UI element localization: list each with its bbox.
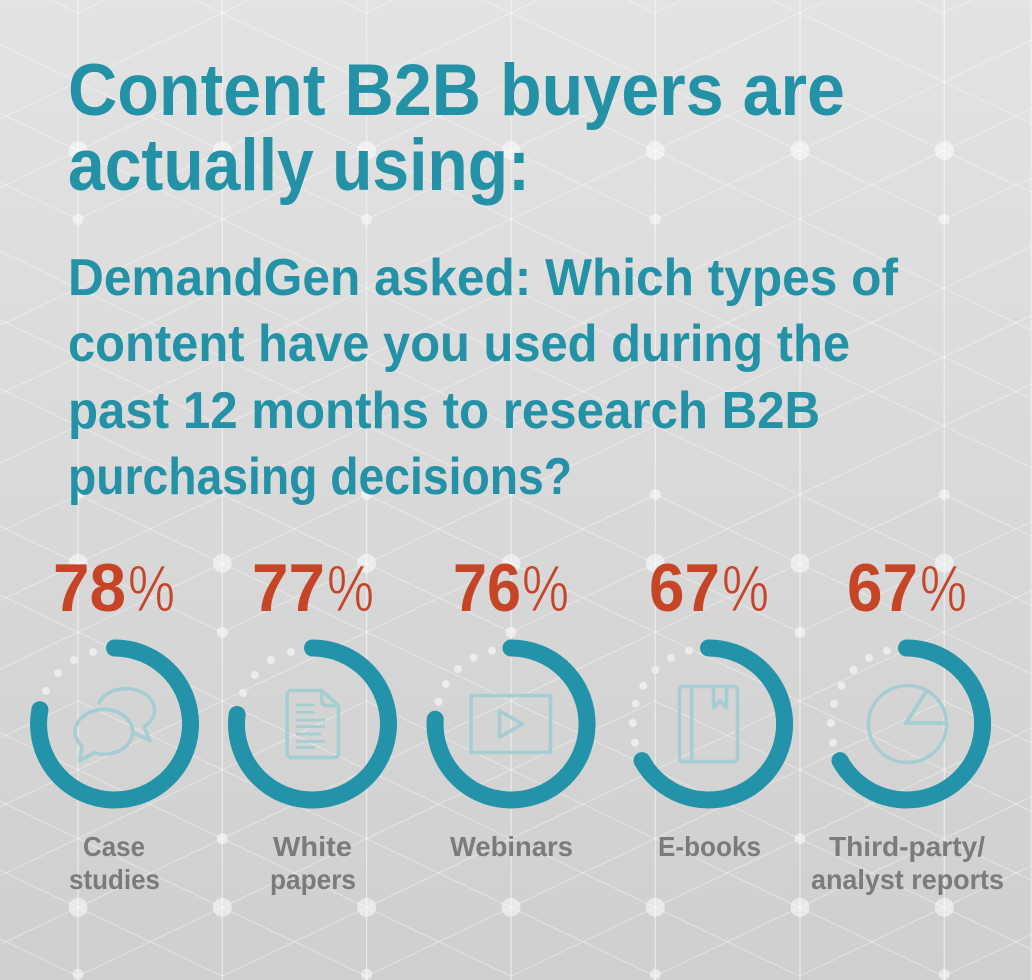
subtitle question: DemandGen asked: Which types of [68,249,899,307]
label: white papers: White [273,831,352,862]
icon: pie chart [868,686,946,762]
label: white papers: papers [270,864,356,895]
label: white papers [270,831,356,895]
stat: e-books 67% [629,550,785,862]
ring chart: 67% [827,647,983,800]
percentage: 67%: 67 [649,550,720,626]
percentage: 78% [53,550,175,626]
ring chart: 67% [629,647,785,800]
stat: webinars 76% [435,550,587,862]
label: third-party analyst reports [811,831,1004,895]
percentage: 67%: 67 [847,550,918,626]
stat: white papers 77% [237,550,389,895]
label: webinars: Webinars [450,831,573,862]
title: actually using: [68,125,530,206]
stat: case studies 78% [39,550,191,895]
percentage: 78%: % [128,551,175,625]
percentage: 76%: 76 [453,550,521,626]
title: Content B2B buyers are [68,50,845,131]
icon: document [287,690,338,758]
ring chart: 78% [39,648,191,800]
percentage: 67%: % [722,551,769,625]
subtitle question: purchasing decisions? [68,448,572,506]
ring chart: 76% [435,647,587,800]
label: case studies: Case [83,831,145,862]
label: third-party analyst reports: analyst reports [811,864,1004,895]
percentage: 78%: 78 [53,550,126,626]
percentage: 77% [252,550,374,626]
percentage: 67% [649,550,769,626]
stat: third-party analyst reports 67% [811,550,1004,895]
title [68,50,845,206]
label: case studies [69,831,160,895]
label: case studies: studies [69,864,160,895]
percentage: 76%: % [522,551,569,625]
subtitle question: content have you used during the [68,315,850,373]
percentage: 76% [453,550,569,626]
subtitle question [68,249,899,506]
icon: book [680,686,738,762]
percentage: 67%: % [920,551,967,625]
label: e-books: E-books [658,831,761,862]
ring chart: 77% [237,648,389,800]
label: third-party analyst reports: Third-party/ [829,831,985,862]
subtitle question: past 12 months to research B2B [68,382,820,440]
percentage: 77%: % [327,551,374,625]
icon: speech bubbles [75,689,154,761]
percentage: 77%: 77 [252,550,325,626]
percentage: 67% [847,550,967,626]
icon: video player [471,696,550,752]
